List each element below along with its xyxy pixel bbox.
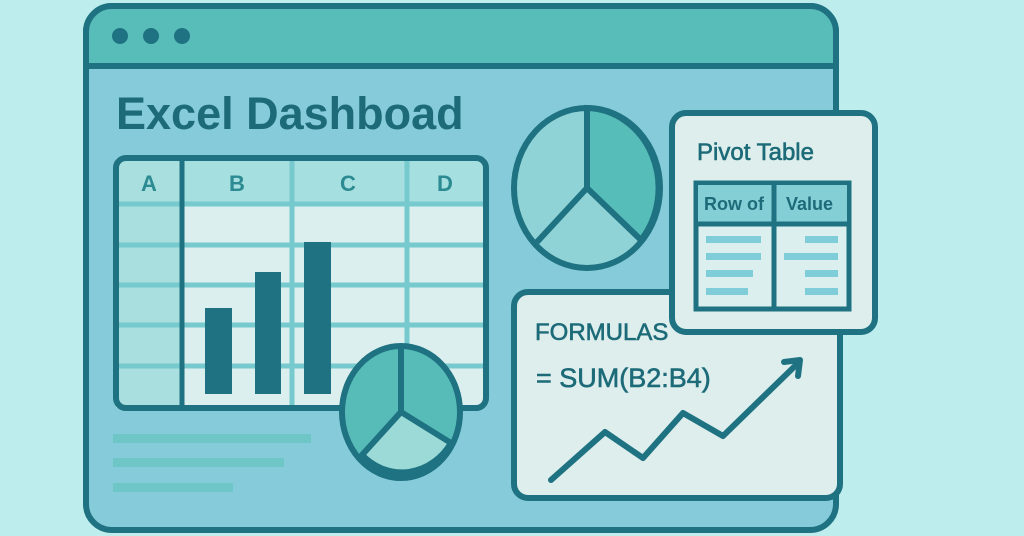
column headers: D [437,171,453,196]
column headers: B [229,171,245,196]
spreadsheet [116,158,486,408]
formulas panel: = SUM(B2:B4) [536,363,711,393]
line chart arrow [551,360,800,480]
pivot table panel [672,113,875,332]
formulas panel: FORMULAS [535,319,668,346]
small pie chart [342,346,460,478]
text lines placeholder [113,434,311,492]
title: Excel Dashboad [116,88,464,139]
column headers [141,171,453,196]
column headers: C [340,171,356,196]
bar chart [205,242,331,394]
title bar [86,6,836,66]
big pie chart [514,108,660,268]
column headers: A [141,171,157,196]
pivot table panel: Value [786,194,833,214]
pivot table panel: Row of [704,194,765,214]
window frame [86,6,836,530]
pivot table panel: Pivot Table [697,139,814,166]
formulas panel [514,292,840,498]
